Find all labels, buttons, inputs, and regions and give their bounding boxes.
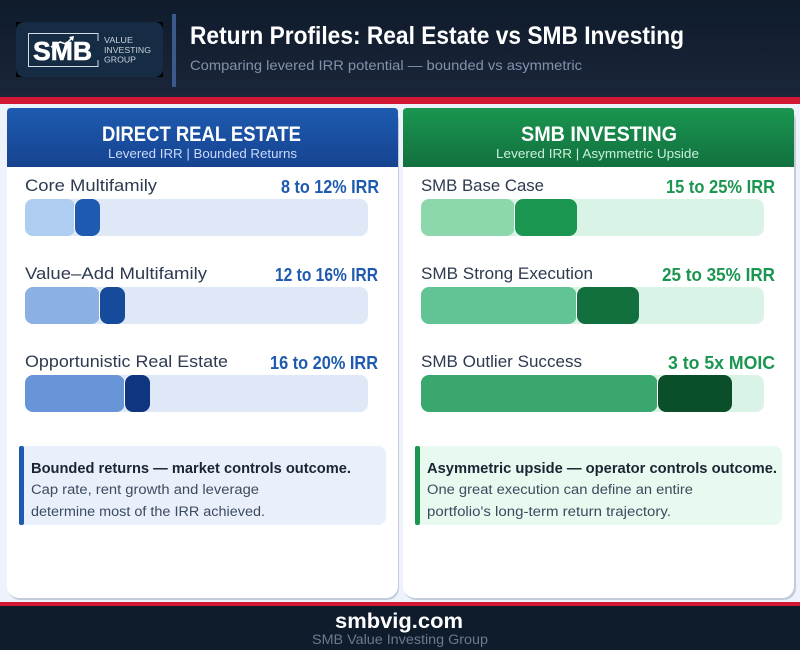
row: smb base case: 15 to 25% IRR: [666, 177, 775, 197]
title: Return Profiles: Real Estate vs SMB Investing: [190, 22, 684, 50]
callout: asymmetric upside: [415, 446, 782, 525]
logo: [16, 22, 163, 77]
header divider: [172, 14, 176, 87]
row: core multifamily: Core Multifamily: [25, 177, 158, 195]
panel header: SMB INVESTING: [521, 123, 677, 146]
row: core multifamily: [25, 177, 379, 236]
logo: INVESTING: [104, 46, 151, 55]
row: value-add multifamily: Value–Add Multifamily: [25, 265, 208, 283]
panel header: [403, 108, 794, 167]
callout: asymmetric upside: portfolio's long-term return trajectory.: [427, 504, 671, 519]
subtitle: Comparing levered IRR potential — bounded vs asymmetric: [190, 57, 582, 73]
panel: direct real estate: [7, 108, 399, 600]
logo: SMB: [33, 36, 92, 66]
panel header: DIRECT REAL ESTATE: [102, 123, 301, 146]
callout: asymmetric upside: One great execution can define an entire: [427, 482, 693, 497]
row: core multifamily: 8 to 12% IRR: [281, 177, 379, 197]
panel: smb investing: [403, 108, 796, 600]
row: smb base case: [421, 177, 775, 236]
panel header: Levered IRR | Bounded Returns: [108, 147, 297, 161]
row: smb outlier success: 3 to 5x MOIC: [668, 353, 775, 373]
logo: VALUE: [104, 36, 133, 45]
callout: bounded returns: Cap rate, rent growth and leverage: [31, 482, 259, 497]
row: opportunistic real estate: 16 to 20% IRR: [270, 353, 378, 373]
callout: bounded returns: determine most of the IRR achieved.: [31, 504, 265, 519]
panel header: Levered IRR | Asymmetric Upside: [496, 147, 699, 161]
row: smb strong execution: SMB Strong Execution: [421, 265, 593, 283]
row: opportunistic real estate: Opportunistic Real Estate: [25, 353, 228, 371]
row: opportunistic real estate: [25, 353, 378, 412]
row: value-add multifamily: [25, 265, 378, 324]
callout: bounded returns: Bounded returns — market controls outcome.: [31, 461, 351, 477]
footer: smbvig.com: [335, 610, 463, 633]
row: smb base case: SMB Base Case: [421, 177, 544, 195]
row: smb outlier success: SMB Outlier Success: [421, 353, 582, 371]
footer: [0, 602, 800, 650]
row: value-add multifamily: 12 to 16% IRR: [275, 265, 378, 285]
logo: GROUP: [104, 56, 136, 64]
footer: SMB Value Investing Group: [312, 632, 488, 647]
row: smb outlier success: [421, 353, 775, 412]
callout: asymmetric upside: Asymmetric upside — operator controls outcome.: [427, 461, 777, 477]
row: smb strong execution: 25 to 35% IRR: [662, 265, 775, 285]
header band: [0, 0, 800, 104]
callout: bounded returns: [19, 446, 386, 525]
row: smb strong execution: [421, 265, 775, 324]
panel header: [7, 108, 398, 167]
